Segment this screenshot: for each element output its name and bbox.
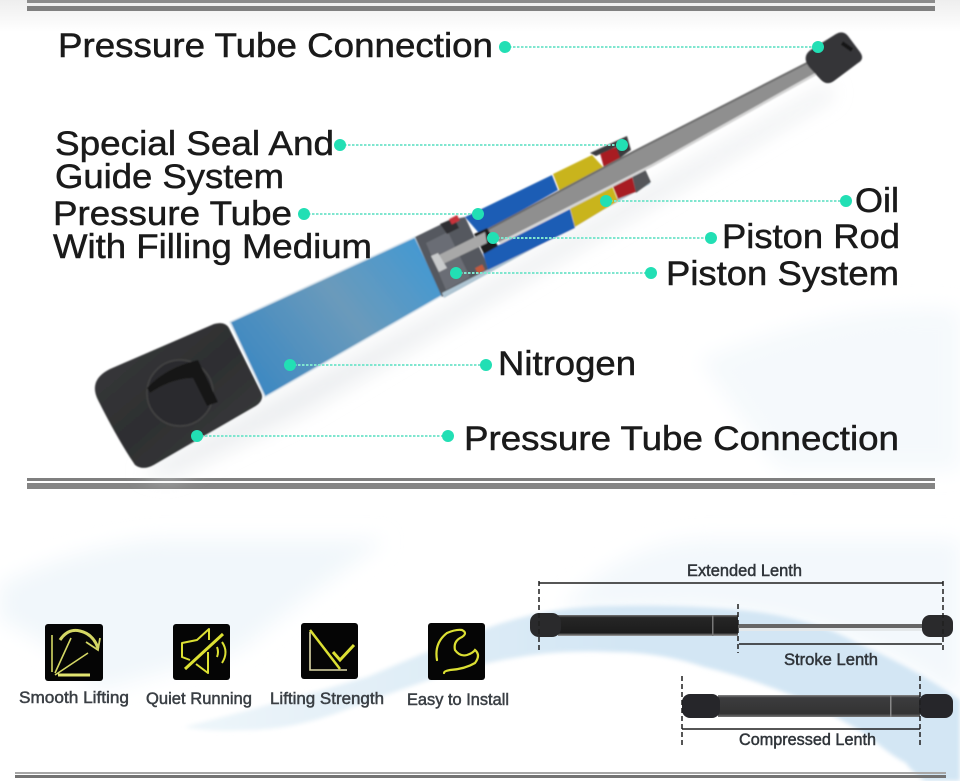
- bottom divider: [15, 772, 946, 778]
- feature labels: Quiet Running: [146, 689, 252, 708]
- gas spring cutaway: [95, 32, 862, 478]
- dimension labels: [687, 561, 878, 749]
- icon: lifting strength: [301, 623, 358, 679]
- yellow seal upper: [553, 155, 604, 192]
- marker dots: [191, 41, 852, 442]
- lower tube wall: [442, 180, 650, 298]
- icon: quiet running: [173, 624, 230, 680]
- callout labels: Oil: [855, 182, 899, 220]
- callout labels: Pressure Tube Connection: [464, 420, 899, 458]
- pressure tube nitrogen chamber: [230, 237, 443, 397]
- top divider: [27, 0, 935, 11]
- feature labels: [19, 688, 509, 709]
- small end connection: [806, 32, 862, 83]
- extended gas spring: [530, 613, 953, 637]
- tube shadow: [140, 85, 835, 478]
- callout labels: Nitrogen: [498, 345, 636, 383]
- blue upper oil chamber: [465, 175, 558, 232]
- callout labels: [53, 27, 900, 458]
- callout labels: Piston System: [666, 255, 899, 293]
- feature labels: Smooth Lifting: [19, 688, 129, 707]
- icon: easy to install: [428, 623, 485, 680]
- callout labels: Pressure Tube Connection: [58, 27, 493, 65]
- compressed gas spring: [682, 694, 953, 718]
- icon: smooth lifting: [45, 624, 103, 681]
- callout labels: Special Seal And: [55, 125, 334, 163]
- yellow seal lower: [570, 186, 618, 227]
- callout labels: With Filling Medium: [53, 228, 372, 266]
- dimension lines: [539, 581, 943, 746]
- callout labels: Piston Rod: [722, 218, 900, 256]
- dimension labels: Stroke Lenth: [784, 650, 878, 669]
- large end connection: [95, 323, 262, 468]
- guide caps: [590, 136, 631, 158]
- callout labels: Guide System: [55, 158, 284, 196]
- piston block: [415, 215, 490, 297]
- dimension labels: Extended Lenth: [687, 561, 802, 580]
- callout labels: Pressure Tube: [53, 195, 292, 233]
- leader lines: [197, 47, 846, 436]
- red seals: [600, 147, 622, 168]
- middle divider: [27, 478, 935, 489]
- feature labels: Easy to Install: [407, 690, 509, 709]
- dimension labels: Compressed Lenth: [739, 730, 876, 749]
- blue lower oil chamber: [483, 209, 575, 270]
- feature labels: Lifting Strength: [270, 689, 384, 708]
- piston rod: [487, 63, 823, 243]
